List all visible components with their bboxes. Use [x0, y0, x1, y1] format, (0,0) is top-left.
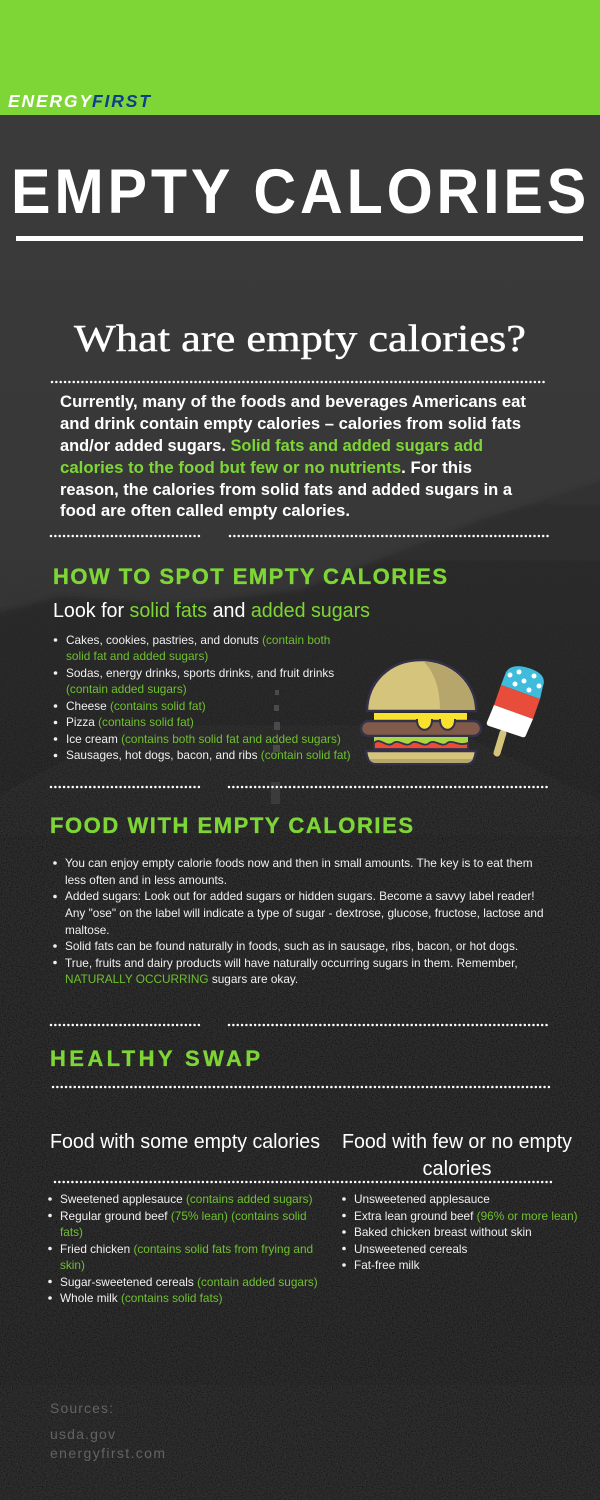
list: few or no empty calories: Extra lean ground beef (96% or more lean)	[354, 1209, 578, 1223]
header band	[0, 0, 600, 115]
icon: burger	[361, 660, 481, 764]
column heading: few or no empty calories: Food with few or no empty	[342, 1131, 572, 1153]
intro paragraph: food are often called empty calories.	[60, 502, 350, 520]
list: food advice: less often and in less amounts.	[65, 873, 227, 887]
list: some empty calories: Whole milk (contains solid fats)	[60, 1291, 223, 1305]
list: foods to spot: solid fat and added sugars)	[66, 649, 208, 663]
divider	[55, 1181, 554, 1183]
intro paragraph: and/or added sugars. Solid fats and added sugars add	[60, 437, 483, 455]
divider	[51, 1024, 549, 1026]
list: few or no empty calories: Fat-free milk	[354, 1258, 420, 1272]
divider	[51, 786, 549, 788]
list: foods to spot: Sausages, hot dogs, bacon, and ribs (contain solid fat)	[66, 748, 351, 762]
heading: what are empty calories: What are empty calories?	[74, 318, 526, 360]
list: some empty calories: Fried chicken (contains solid fats from frying and	[60, 1242, 313, 1256]
list: some empty calories: Sugar-sweetened cereals (contain added sugars)	[60, 1275, 318, 1289]
list: foods to spot: Sodas, energy drinks, sports drinks, and fruit drinks	[66, 666, 334, 680]
intro paragraph: and drink contain empty calories – calories from solid fats	[60, 415, 521, 433]
list: some empty calories: Sweetened applesauce (contains added sugars)	[60, 1192, 313, 1206]
list: foods to spot: Pizza (contains solid fat)	[66, 715, 194, 729]
list: few or no empty calories: Unsweetened applesauce	[354, 1192, 490, 1206]
logo: FIRST	[92, 91, 151, 111]
column heading: few or no empty calories	[342, 1131, 572, 1180]
title: EMPTY CALORIES	[11, 156, 586, 226]
intro paragraph	[60, 393, 526, 520]
list: some empty calories: fats)	[60, 1225, 83, 1239]
divider	[52, 381, 547, 383]
sources: energyfirst.com	[50, 1445, 165, 1461]
list: foods to spot: Cakes, cookies, pastries, and donuts (contain both	[66, 633, 330, 647]
list: few or no empty calories: Baked chicken breast without skin	[354, 1225, 532, 1239]
divider	[51, 535, 551, 537]
list: some empty calories: Regular ground beef (75% lean) (contains solid	[60, 1209, 307, 1223]
list: food advice: NATURALLY OCCURRING sugars are okay.	[65, 972, 298, 986]
divider	[53, 1086, 552, 1088]
heading: food with empty calories: FOOD WITH EMPTY CALORIES	[50, 813, 413, 838]
list: foods to spot	[54, 633, 351, 762]
intro paragraph: calories to the food but few or no nutrients . For this	[60, 459, 472, 477]
list: food advice: maltose.	[65, 923, 110, 937]
column heading: few or no empty calories: calories	[423, 1158, 491, 1180]
column heading: some empty calories: Food with some empty calories	[50, 1131, 320, 1153]
list: foods to spot: Ice cream (contains both solid fat and added sugars)	[66, 732, 341, 746]
title rule	[16, 236, 583, 241]
sources: usda.gov	[50, 1426, 115, 1442]
sources: Sources:	[50, 1400, 113, 1416]
heading: healthy swap: HEALTHY SWAP	[50, 1046, 260, 1071]
icon: popsicle	[487, 666, 544, 753]
list: few or no empty calories: Unsweetened cereals	[354, 1242, 468, 1256]
sources	[50, 1400, 165, 1461]
list: food advice: Added sugars: Look out for added sugars or hidden sugars. Become a savvy label reader!	[65, 889, 535, 903]
intro paragraph: Currently, many of the foods and beverages Americans eat	[60, 393, 526, 411]
subheading: look for: Look for solid fats and added sugars	[53, 600, 370, 622]
logo: ENERGY	[8, 91, 92, 111]
logo	[8, 91, 151, 111]
list: foods to spot: Cheese (contains solid fat)	[66, 699, 206, 713]
list: food advice: You can enjoy empty calorie foods now and then in small amounts. The key is to eat them	[65, 856, 533, 870]
list: some empty calories	[48, 1192, 318, 1305]
list: foods to spot: (contain added sugars)	[66, 682, 187, 696]
list: few or no empty calories	[342, 1192, 578, 1272]
list: food advice: Any "ose" on the label will indicate a type of sugar - dextrose, glucose, fructose, lactose and	[65, 906, 544, 920]
list: food advice	[53, 856, 544, 986]
intro paragraph: reason, the calories from solid fats and added sugars in a	[60, 481, 513, 499]
list: food advice: Solid fats can be found naturally in foods, such as in sausage, ribs, bacon, or hot dogs.	[65, 939, 518, 953]
list: food advice: True, fruits and dairy products will have naturally occurring sugars in them. Remember,	[65, 956, 518, 970]
list: some empty calories: skin)	[60, 1258, 85, 1272]
heading: how to spot: HOW TO SPOT EMPTY CALORIES	[53, 564, 447, 589]
